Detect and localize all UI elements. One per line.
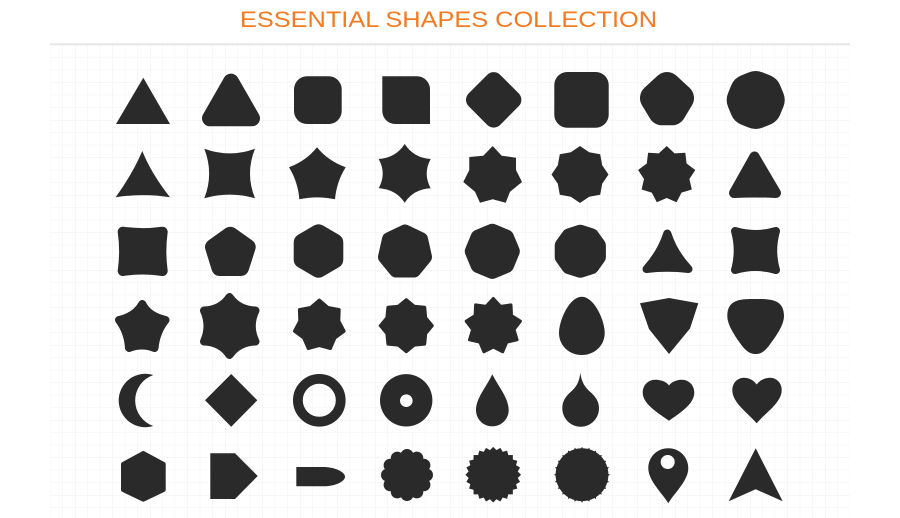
shape: six point star [379,144,431,203]
shape: rounded seven point star [294,300,344,348]
shape: soft hexagon [303,233,334,269]
shape: rounded octagon [745,89,767,111]
shape: rounded diamond [475,81,512,119]
shape: soft triangle [734,156,776,193]
row 4: rounded stars, egg, shield, pick [119,297,784,355]
shape: disc with small hole [380,374,432,426]
shape: nine point star [638,146,695,202]
row 3: soft polygons [123,231,776,271]
shape: diamond [205,374,257,427]
row 5: crescent, diamond, rings, drops, hearts [119,373,782,427]
shape: pointed drop [562,373,599,427]
shape: teardrop [476,374,509,426]
shape: concave square [204,149,255,198]
shape: eight point star [552,146,608,203]
shape: fine toothed seal [554,438,619,505]
shape: soft heptagon [385,232,425,270]
shape: soft octagon [473,232,512,271]
shape: rounded square [294,76,342,124]
shape: toothed burst badge [465,447,521,502]
shape: soft curved triangle [646,234,688,269]
title: ESSENTIAL SHAPES COLLECTION [240,7,657,32]
shape: soft concave square [735,231,776,270]
shape: rounded pentagon [654,86,680,111]
shape: rounded six point star [204,297,256,355]
shape: map pin [648,448,688,503]
shape: egg [559,297,605,355]
shape: scalloped badge [381,449,433,501]
shape: puffy square [123,232,163,271]
shape: pentagon arrow [210,453,258,499]
shape: soft decagon [563,233,598,270]
shape: soft pentagon [213,235,248,268]
shape: shield [640,298,698,354]
shape: rounded five point star [119,304,166,348]
shape: navigation arrow [729,448,783,501]
shape: curved triangle [116,151,170,197]
row 1: triangles, squares, rounded polygons [116,72,767,128]
shape: triangle [116,78,170,124]
shape: hexagon [123,453,164,500]
shape: seven point star [463,146,522,203]
shape: ring [298,379,341,422]
shape: tall heart [732,378,782,423]
shape: guitar pick [727,299,784,354]
shape: bullet [296,467,345,486]
shape: wide heart [643,380,694,421]
shape: leaf square [382,76,430,124]
shape: rounded eight point star [380,300,432,352]
row 6: hexagon, tag, bullet, badges, pin, arrow [123,438,783,505]
shape: rounded triangle [210,82,252,118]
shape: crescent [119,374,153,427]
shape: concave pentagon [289,147,346,199]
shape: rounded nine point star [466,298,520,352]
row 2: concave shapes and stars [116,144,776,203]
shape: large rounded square [554,72,609,128]
